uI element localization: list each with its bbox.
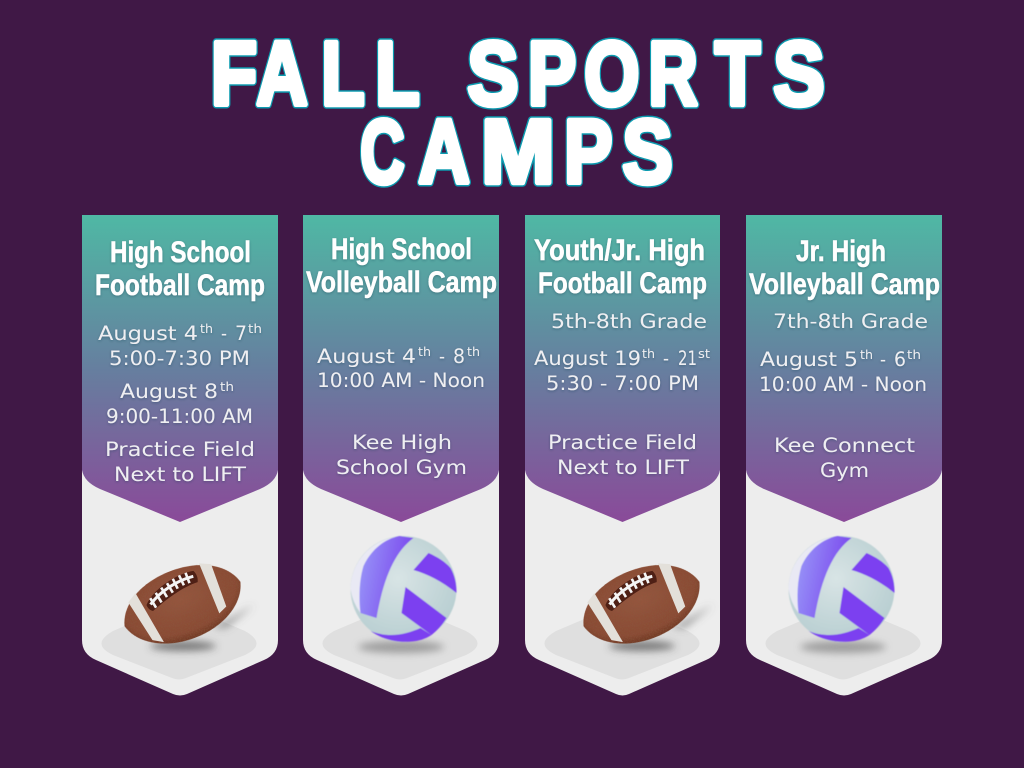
- platform: [322, 604, 478, 680]
- title: L: [322, 24, 364, 124]
- schedule and location text: 10:00 AM - Noon: [759, 373, 927, 396]
- schedule and location text: Next to LIFT: [114, 463, 246, 486]
- panel: junior high volleyball camp: [746, 215, 942, 696]
- card body: [303, 215, 499, 696]
- title: F: [211, 24, 257, 124]
- schedule and location text: -: [880, 348, 886, 371]
- title: M: [481, 102, 555, 202]
- title: [211, 24, 824, 202]
- title: R: [649, 24, 698, 124]
- heading: Football Camp: [538, 267, 707, 300]
- schedule and location text: August 5: [760, 348, 858, 371]
- title: T: [715, 24, 760, 124]
- title: S: [468, 24, 518, 124]
- banner: [82, 215, 278, 522]
- panel: youth and junior high football camp: [525, 215, 720, 696]
- schedule and location text: August 4: [98, 322, 198, 345]
- heading: [95, 236, 265, 302]
- schedule and location text: 10:00 AM - Noon: [317, 369, 485, 392]
- platform: [766, 604, 920, 680]
- schedule and location text: -: [663, 347, 669, 370]
- heading: Volleyball Camp: [306, 266, 497, 299]
- title: S: [622, 102, 672, 202]
- schedule and location text: [317, 345, 485, 479]
- title: F: [211, 24, 257, 124]
- panel: high school volleyball camp: [303, 215, 499, 696]
- schedule and location text: th: [220, 380, 234, 394]
- schedule and location text: 7th-8th Grade: [773, 310, 928, 333]
- schedule and location text: Kee High: [352, 431, 452, 454]
- schedule and location text: Practice Field: [105, 438, 255, 461]
- banner: [746, 215, 942, 522]
- schedule and location text: -: [439, 345, 445, 368]
- title: A: [418, 102, 470, 202]
- ball shadow: [609, 605, 713, 651]
- schedule and location text: 5:00-7:30 PM: [109, 347, 250, 370]
- title: C: [360, 102, 404, 202]
- icon: football: [112, 549, 253, 660]
- heading: [534, 234, 707, 300]
- schedule and location text: 5:30 - 7:00 PM: [546, 372, 699, 395]
- card body: [82, 215, 278, 696]
- title: A: [418, 102, 470, 202]
- schedule and location text: th: [467, 345, 480, 359]
- schedule and location text: 6: [894, 348, 906, 371]
- title: S: [774, 24, 824, 124]
- heading: High School: [331, 233, 472, 266]
- card body: [525, 215, 720, 696]
- ball shadow: [800, 641, 886, 653]
- heading: Football Camp: [95, 269, 265, 302]
- title: L: [376, 24, 420, 124]
- title: S: [468, 24, 518, 124]
- schedule and location text: [534, 310, 710, 479]
- schedule and location text: Practice Field: [548, 431, 697, 454]
- title: A: [256, 24, 308, 124]
- title: M: [481, 102, 555, 202]
- title: R: [649, 24, 698, 124]
- heading: [306, 233, 497, 299]
- heading: High School: [110, 236, 251, 269]
- icon: football: [571, 549, 712, 660]
- schedule and location text: School Gym: [336, 456, 467, 479]
- schedule and location text: 7: [235, 322, 247, 345]
- title: P: [564, 102, 612, 202]
- platform: [544, 604, 700, 680]
- schedule and location text: Gym: [820, 459, 869, 482]
- panel: high school football camp: [82, 215, 278, 696]
- title: S: [774, 24, 824, 124]
- schedule and location text: th: [907, 348, 921, 362]
- schedule and location text: -: [221, 322, 227, 345]
- schedule and location text: th: [418, 345, 431, 359]
- heading: Volleyball Camp: [749, 268, 940, 301]
- heading: [749, 235, 940, 301]
- platform: [102, 604, 256, 680]
- schedule and location text: 9:00-11:00 AM: [106, 405, 253, 428]
- schedule and location text: August 19: [534, 347, 641, 370]
- title: P: [528, 24, 576, 124]
- schedule and location text: th: [860, 348, 873, 362]
- schedule and location text: Next to LIFT: [557, 456, 689, 479]
- schedule and location text: th: [200, 322, 213, 336]
- banner: [303, 215, 499, 522]
- schedule and location text: August 8: [120, 380, 218, 403]
- schedule and location text: August 4: [317, 345, 416, 368]
- schedule and location text: th: [248, 322, 262, 336]
- title: P: [528, 24, 576, 124]
- schedule and location text: th: [642, 347, 655, 361]
- title: T: [715, 24, 760, 124]
- heading: Jr. High: [796, 235, 886, 268]
- schedule and location text: 5th-8th Grade: [551, 310, 707, 333]
- title: P: [564, 102, 612, 202]
- title: L: [376, 24, 420, 124]
- icon: volleyball: [350, 536, 456, 642]
- schedule and location text: Kee Connect: [774, 434, 915, 457]
- schedule and location text: 21: [678, 347, 697, 370]
- title: O: [584, 24, 639, 124]
- schedule and location text: [759, 310, 928, 482]
- banner: [525, 215, 720, 522]
- icon: volleyball: [788, 536, 894, 642]
- title: S: [622, 102, 672, 202]
- title: L: [322, 24, 364, 124]
- title: O: [584, 24, 639, 124]
- heading: Youth/Jr. High: [534, 234, 705, 267]
- schedule and location text: st: [698, 347, 710, 361]
- card body: [746, 215, 942, 696]
- schedule and location text: [98, 322, 262, 486]
- ball shadow: [150, 605, 254, 651]
- ball shadow: [358, 641, 444, 653]
- schedule and location text: 8: [453, 345, 465, 368]
- title: C: [360, 102, 404, 202]
- title: A: [256, 24, 308, 124]
